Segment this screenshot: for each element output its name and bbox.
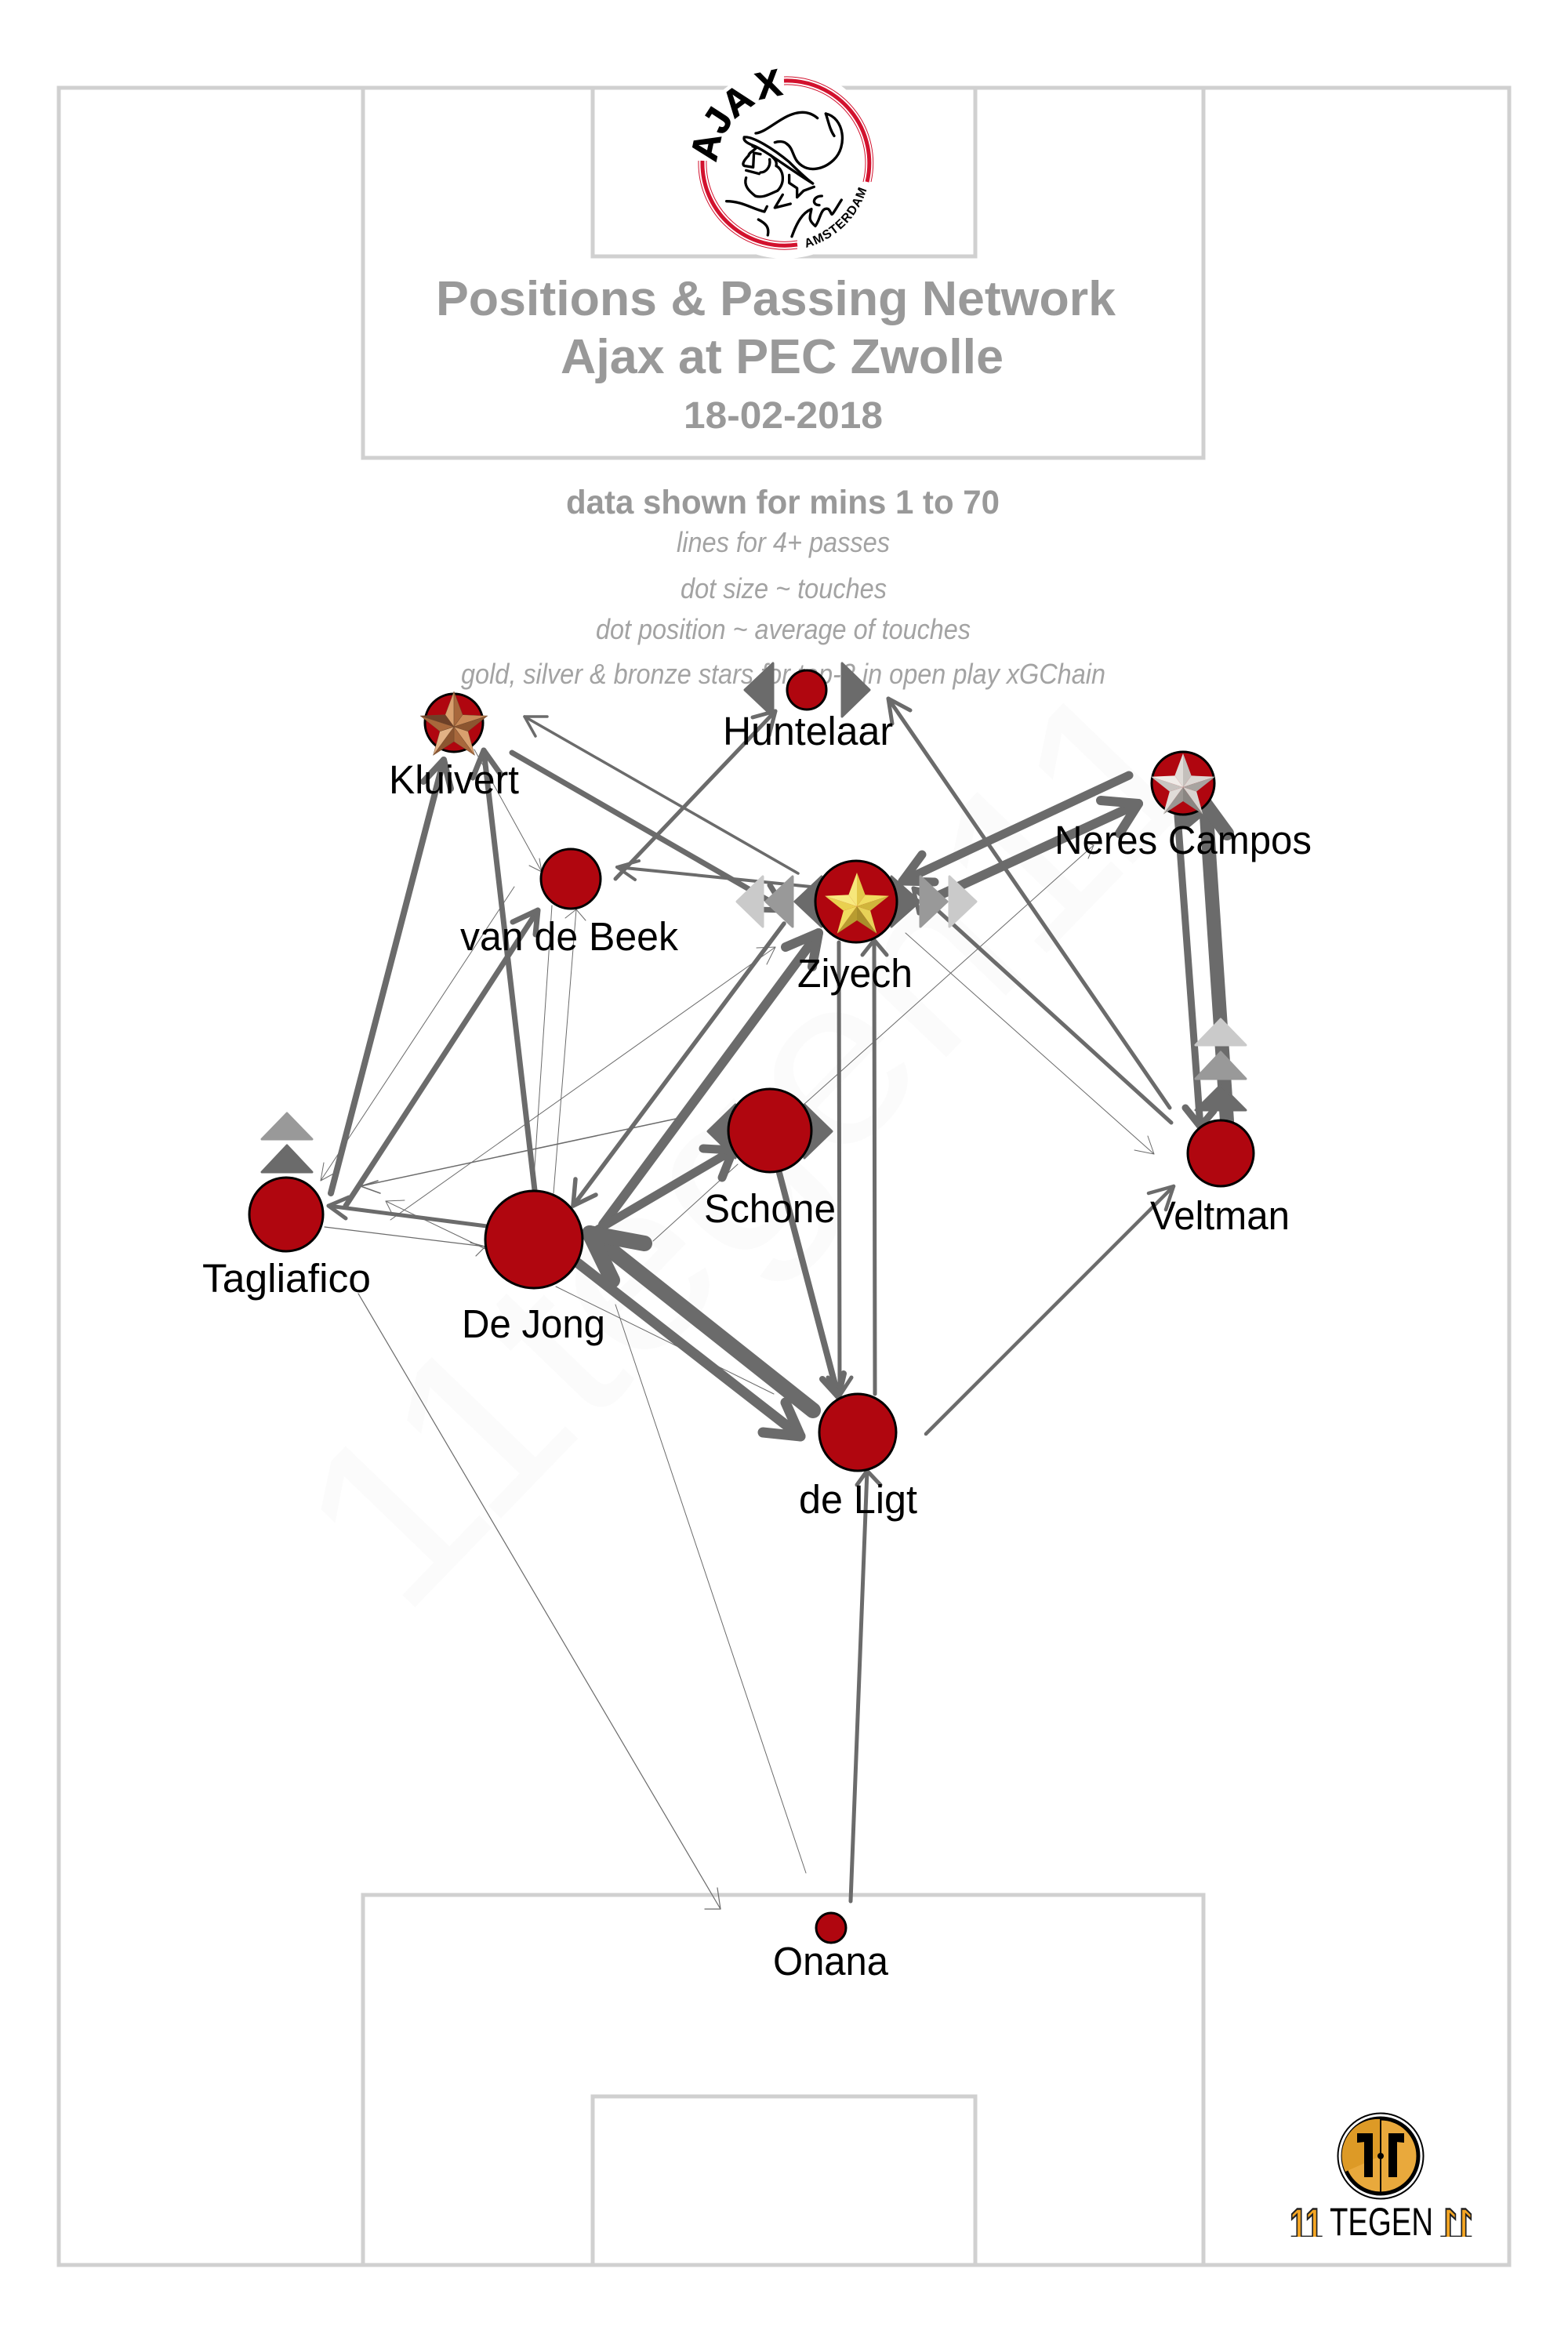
player labels: Veltman bbox=[1150, 1193, 1290, 1238]
direction markers: Schone bbox=[708, 1105, 832, 1158]
arrow: Veltman to Ziyech bbox=[913, 888, 1171, 1123]
thin arrow: Onana to De Jong bbox=[615, 1305, 806, 1873]
player dot: van de Beek bbox=[541, 849, 601, 909]
wordmark: TEGEN bbox=[1330, 2200, 1433, 2244]
arrow: Ziyech to de Ligt bbox=[828, 942, 851, 1396]
arrow: de Ligt to De Jong bbox=[590, 1233, 813, 1410]
player dot: Huntelaar bbox=[787, 670, 826, 710]
passing network arrows bbox=[321, 699, 1227, 1909]
thin arrow: Schone to Neres Campos bbox=[804, 842, 1094, 1105]
legend notes: dot size ~ touches bbox=[681, 572, 887, 604]
arrow: De Jong to Kluivert bbox=[473, 750, 535, 1190]
icon: Ajax crest: A bbox=[714, 77, 761, 126]
icon: gold star bbox=[825, 873, 889, 934]
thin arrow: Schone to Tagliafico bbox=[361, 1119, 676, 1193]
player dot: Neres Campos bbox=[1152, 752, 1214, 815]
thin arrow: Ziyech to Veltman bbox=[906, 933, 1154, 1154]
legend notes: dot position ~ average of touches bbox=[596, 613, 971, 645]
arrow: Ziyech to Kluivert bbox=[524, 717, 798, 873]
thin arrow: Kluivert to van de Beek bbox=[474, 750, 542, 872]
match date: 18-02-2018 bbox=[684, 395, 883, 437]
player labels: Neres Campos bbox=[1054, 818, 1312, 862]
subtitle: Ajax at PEC Zwolle bbox=[561, 330, 1004, 384]
arrow: De Jong to Schone bbox=[598, 1149, 733, 1229]
player labels: De Jong bbox=[462, 1301, 605, 1346]
arrow: Ziyech to Neres Campos bbox=[938, 800, 1138, 896]
thin arrow: De Jong to van de Beek bbox=[554, 909, 586, 1193]
player labels bbox=[202, 709, 1312, 1984]
data range note: data shown for mins 1 to 70 bbox=[566, 484, 1000, 521]
icon: 11tegen11 logo: 11 bbox=[1290, 2199, 1323, 2252]
thin arrow: De Jong to Tagliafico bbox=[386, 1200, 485, 1249]
player dot: Kluivert bbox=[425, 694, 483, 752]
arrow: Veltman to Huntelaar bbox=[888, 699, 1170, 1108]
icon: Ajax crest: A bbox=[684, 129, 730, 165]
icon: 11tegen11 logo bbox=[1290, 2112, 1472, 2237]
player dot: Ziyech bbox=[815, 861, 897, 942]
arrow: Ziyech to De Jong bbox=[573, 924, 784, 1206]
icon: Ajax crest bbox=[684, 62, 873, 259]
player labels: van de Beek bbox=[460, 914, 678, 959]
arrow: de Ligt to Ziyech bbox=[862, 940, 887, 1394]
arrow: Tagliafico to Kluivert bbox=[331, 760, 451, 1193]
arrow: de Ligt to Veltman bbox=[926, 1186, 1174, 1434]
player labels: Huntelaar bbox=[723, 709, 893, 753]
player labels: Kluivert bbox=[389, 757, 519, 802]
watermark: 11tegen11 bbox=[248, 627, 1255, 1657]
icon: Ajax crest: X bbox=[752, 62, 785, 108]
direction markers: Huntelaar bbox=[745, 663, 869, 717]
icon: Ajax crest: J bbox=[695, 100, 742, 140]
arrow: De Jong to Ziyech bbox=[603, 933, 818, 1225]
legend notes: gold, silver & bronze stars for top-3 in open play xGChain bbox=[461, 658, 1105, 690]
arrow: Schone to de Ligt bbox=[779, 1173, 844, 1396]
legend notes bbox=[461, 526, 1105, 690]
arrow: van de Beek to Huntelaar bbox=[615, 711, 775, 879]
thin arrow: Tagliafico to De Jong bbox=[325, 1227, 485, 1256]
player labels: Onana bbox=[773, 1939, 889, 1984]
player labels: de Ligt bbox=[799, 1477, 917, 1522]
arrow: Tagliafico to van de Beek bbox=[346, 910, 538, 1206]
arrow: De Jong to de Ligt bbox=[578, 1263, 800, 1436]
icon: Ajax crest: AMSTERDAM bbox=[806, 187, 867, 248]
thin arrow: Schone to De Jong bbox=[653, 1164, 738, 1241]
player labels: Ziyech bbox=[797, 951, 913, 996]
icon: silver star bbox=[1151, 753, 1215, 815]
player dot: Tagliafico bbox=[249, 1178, 323, 1251]
player dot: Veltman bbox=[1188, 1120, 1254, 1186]
player dot: Schone bbox=[728, 1089, 811, 1172]
thin arrow: De Jong to de Ligt bbox=[556, 1287, 774, 1394]
player dot: de Ligt bbox=[819, 1394, 896, 1471]
thin arrow: Tagliafico to Ziyech bbox=[390, 947, 775, 1220]
thin arrow: van de Beek to De Jong bbox=[533, 906, 552, 1190]
arrow: Neres Campos to Ziyech bbox=[902, 775, 1129, 882]
title: Positions & Passing Network bbox=[436, 272, 1116, 326]
player labels: Schone bbox=[704, 1186, 836, 1231]
legend notes: lines for 4+ passes bbox=[677, 526, 890, 558]
player dot: De Jong bbox=[485, 1191, 583, 1288]
arrow: Kluivert to Ziyech bbox=[512, 753, 786, 910]
arrow: Ziyech to van de Beek bbox=[617, 861, 811, 887]
direction markers: Tagliafico bbox=[262, 1113, 312, 1172]
title block bbox=[436, 272, 1116, 521]
thin arrow: van de Beek to Tagliafico bbox=[321, 887, 514, 1181]
icon: 11tegen11 logo: 11 bbox=[1440, 2199, 1473, 2252]
player labels: Tagliafico bbox=[202, 1256, 371, 1301]
arrow: Veltman to Neres Campos bbox=[1186, 804, 1227, 1121]
arrow: Neres Campos to Veltman bbox=[1178, 815, 1214, 1127]
direction markers: Ziyech bbox=[737, 877, 976, 927]
icon: bronze star bbox=[420, 691, 488, 755]
thin arrow: Tagliafico to Onana box bbox=[358, 1294, 720, 1909]
direction markers: Veltman bbox=[1196, 1019, 1246, 1110]
arrow: De Jong to Tagliafico bbox=[328, 1197, 487, 1226]
player dot: Onana bbox=[816, 1913, 846, 1943]
arrow: Onana to de Ligt bbox=[851, 1471, 880, 1901]
